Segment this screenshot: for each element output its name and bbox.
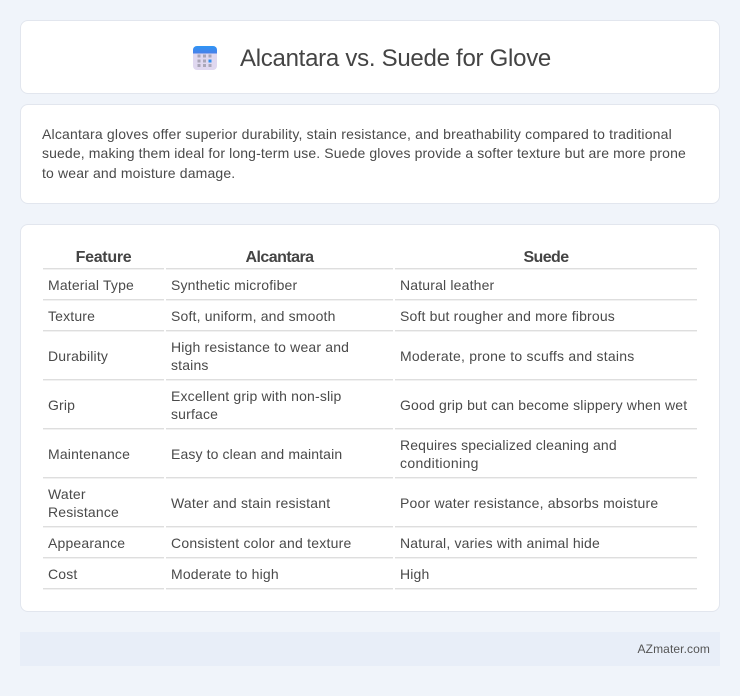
comparison table: High <box>400 566 429 582</box>
comparison table: Poor water resistance, absorbs moisture <box>400 495 658 511</box>
comparison table: Moderate, prone to scuffs and stains <box>400 348 634 364</box>
row: Grip <box>48 388 688 422</box>
row: Maintenance <box>48 437 617 471</box>
comparison table: Soft but rougher and more fibrous <box>400 308 615 324</box>
comparison table: Material Type <box>48 277 134 293</box>
comparison table: High resistance to wear and <box>171 339 349 355</box>
footer bar <box>20 632 720 666</box>
header: Suede: Suede <box>523 249 569 266</box>
row: Appearance <box>48 535 600 551</box>
comparison table: Grip <box>48 397 75 413</box>
comparison table: Easy to clean and maintain <box>171 446 342 462</box>
comparison table: Resistance <box>48 504 119 520</box>
comparison table: stains <box>171 357 209 373</box>
footer text: AZmater.com <box>638 642 710 656</box>
row: Material Type <box>48 277 494 293</box>
comparison table: Appearance <box>48 535 125 551</box>
comparison table: Natural, varies with animal hide <box>400 535 600 551</box>
intro text: to wear and moisture damage. <box>42 165 235 181</box>
row: Durability <box>48 339 634 373</box>
comparison table: Water <box>48 486 86 502</box>
table card <box>20 224 720 612</box>
intro text <box>42 126 686 181</box>
comparison table: Moderate to high <box>171 566 279 582</box>
comparison table: Good grip but can become slippery when wet <box>400 397 687 413</box>
comparison table: surface <box>171 406 218 422</box>
comparison table: Cost <box>48 566 77 582</box>
comparison table: Excellent grip with non-slip <box>171 388 342 404</box>
icon: calendar <box>193 46 217 70</box>
row: Texture <box>48 308 615 324</box>
comparison table: Consistent color and texture <box>171 535 351 551</box>
comparison table: Synthetic microfiber <box>171 277 297 293</box>
comparison table: Water and stain resistant <box>171 495 330 511</box>
intro text: suede, making them ideal for long-term use. Suede gloves provide a softer texture but are more prone <box>42 145 686 161</box>
row: Water Resistance <box>48 486 658 520</box>
comparison table: conditioning <box>400 455 479 471</box>
comparison table: Texture <box>48 308 95 324</box>
intro card <box>20 104 720 204</box>
comparison table: Soft, uniform, and smooth <box>171 308 336 324</box>
comparison table: Natural leather <box>400 277 494 293</box>
header: Feature: Feature <box>76 249 131 266</box>
comparison table: Maintenance <box>48 446 130 462</box>
comparison table: Requires specialized cleaning and <box>400 437 617 453</box>
title card <box>20 20 720 94</box>
row: Cost <box>48 566 429 582</box>
comparison table: Durability <box>48 348 108 364</box>
intro text: Alcantara gloves offer superior durability, stain resistance, and breathability compared to traditional <box>42 126 672 142</box>
title: Alcantara vs. Suede for Glove <box>240 45 551 72</box>
header: Alcantara: Alcantara <box>246 249 313 266</box>
